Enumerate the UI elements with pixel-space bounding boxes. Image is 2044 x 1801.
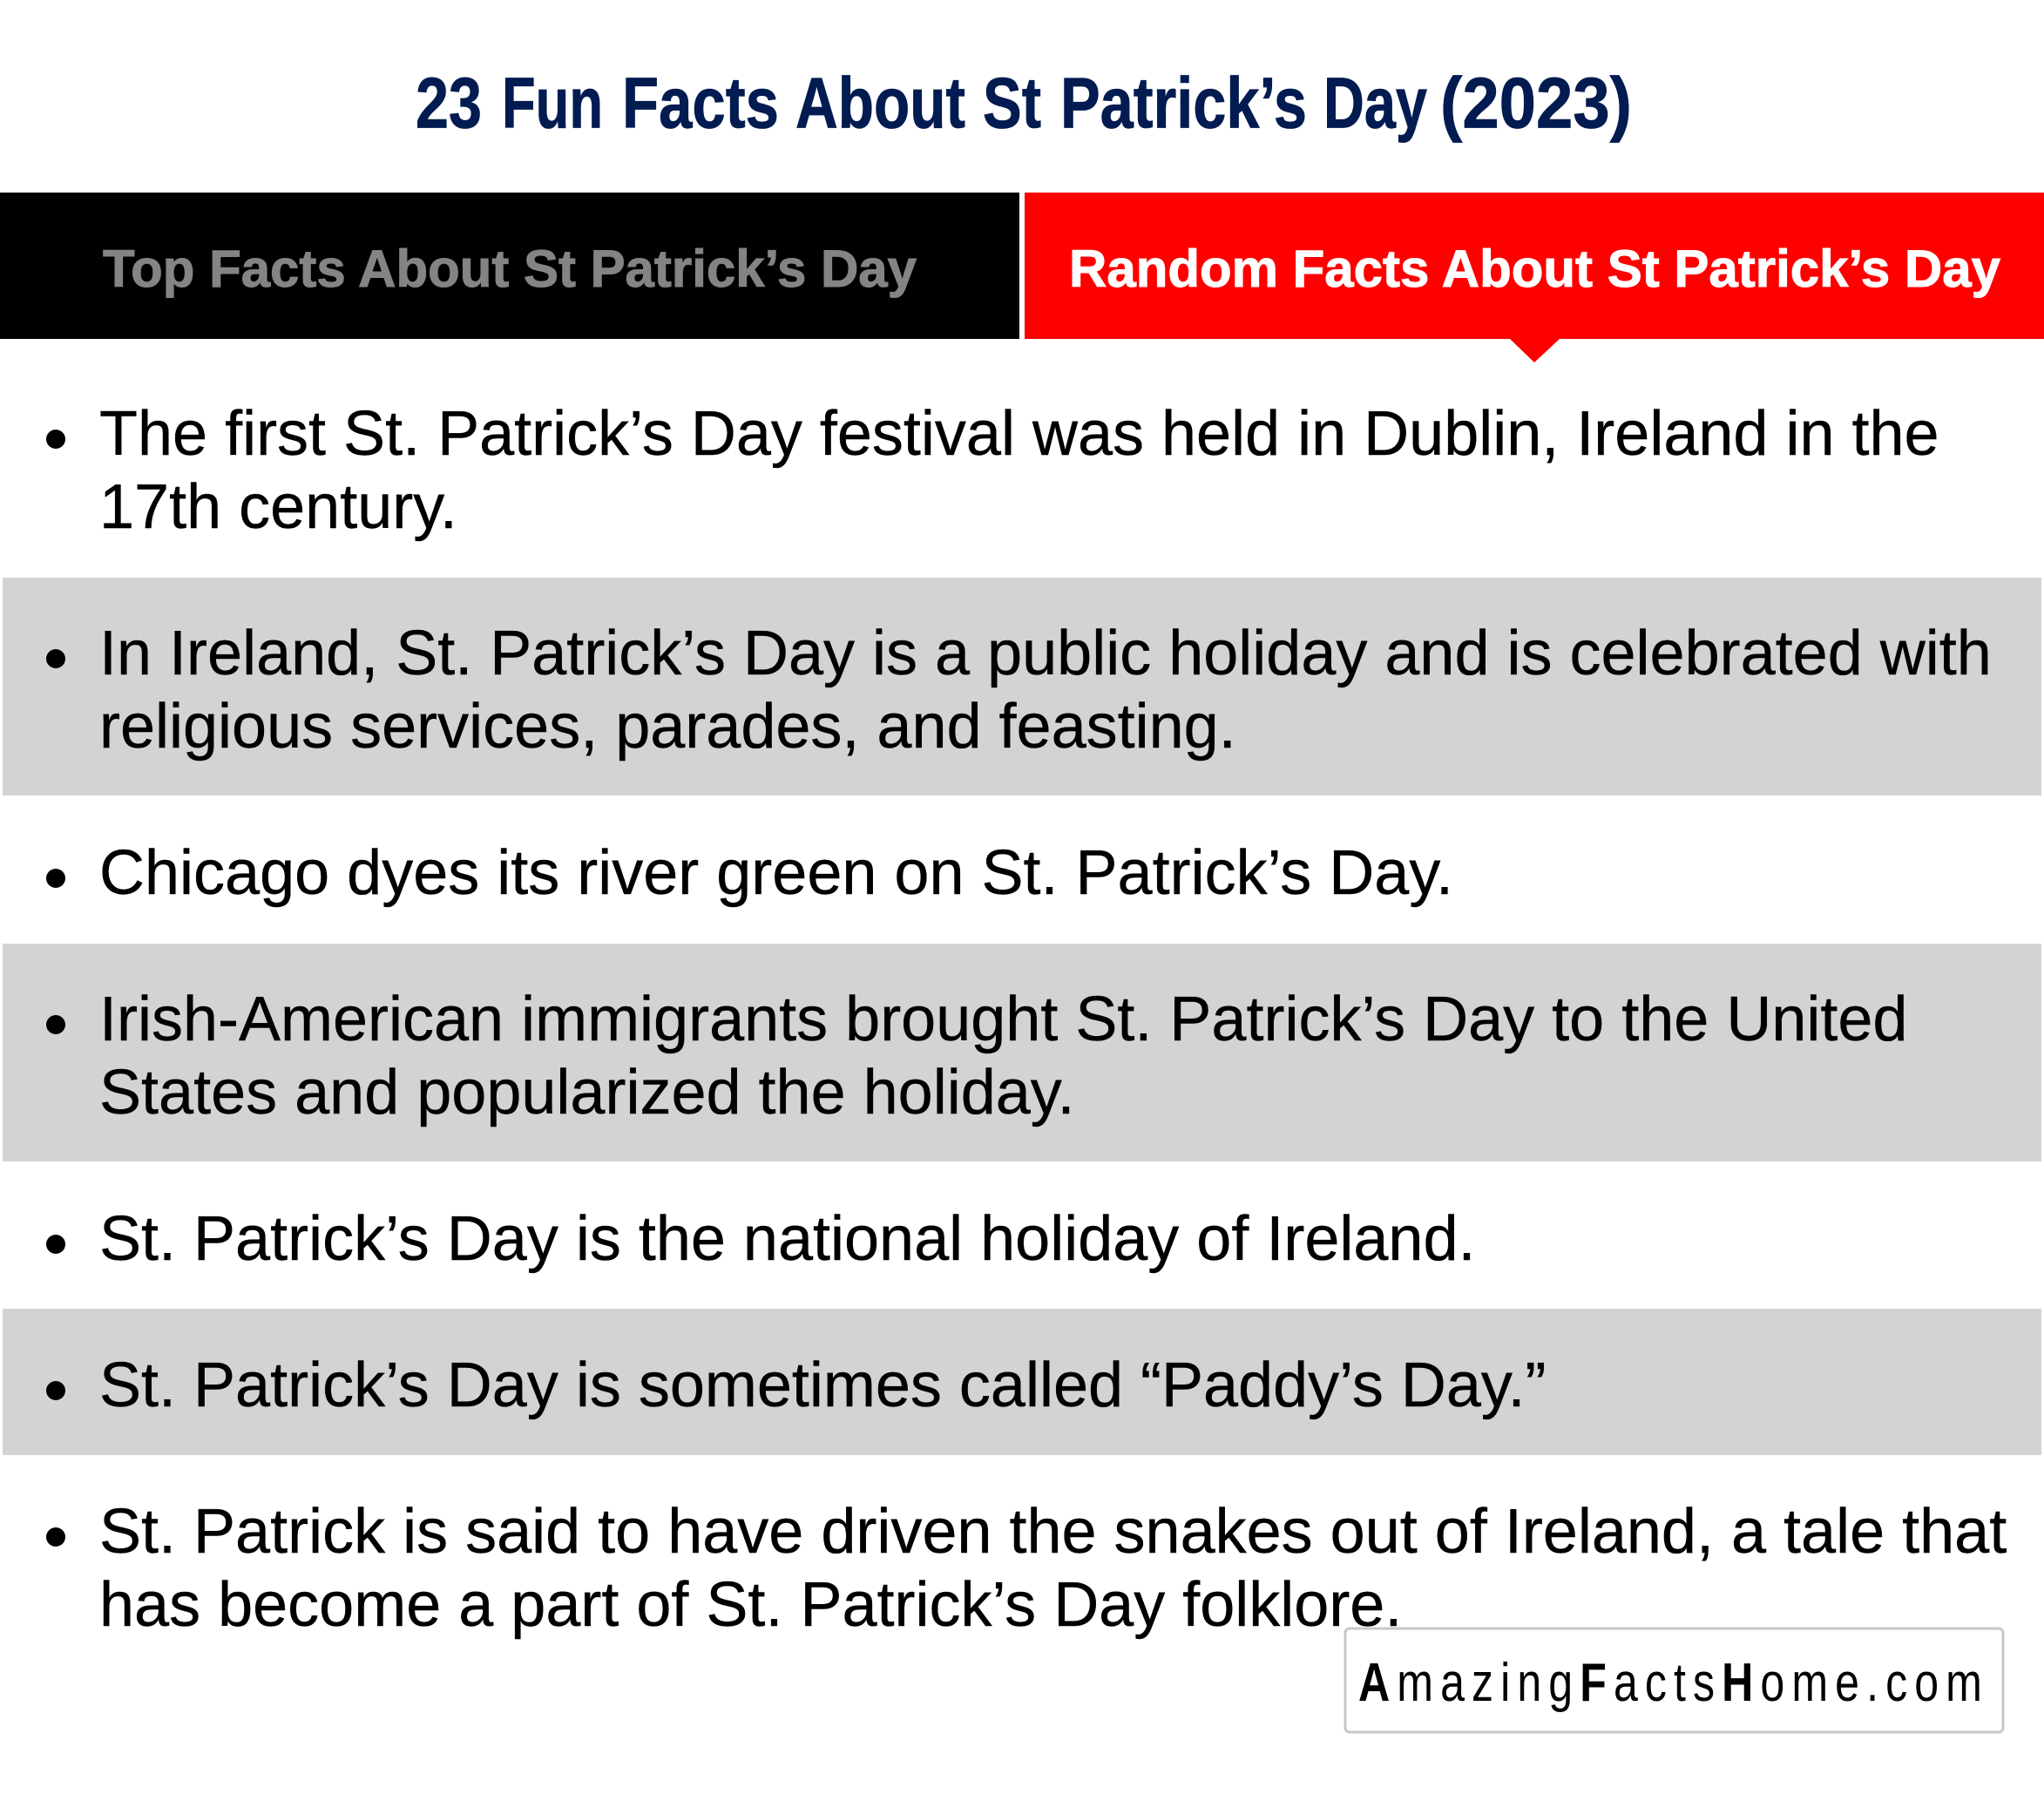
fact row 4: Irish-American immigrants brought St. Patrick’s Day to the United [99, 985, 1907, 1054]
tab: top facts (inactive): Top Facts About St Patrick’s Day [103, 240, 917, 298]
fact row 4 [3, 944, 2041, 1161]
tab: random facts (active): Random Facts About St Patrick’s Day [1069, 240, 2001, 298]
title: St [983, 63, 1041, 143]
title: Day [1323, 63, 1427, 143]
fact row 2: In Ireland, St. Patrick’s Day is a public holiday and is celebrated with [99, 619, 1992, 688]
tab: top facts (inactive) [0, 193, 1019, 339]
fact row 1 [46, 399, 1939, 542]
fact row 3: Chicago dyes its river green on St. Patrick’s Day. [99, 838, 1453, 908]
title: 23 [416, 63, 482, 143]
fact row 1: The first St. Patrick’s Day festival was held in Dublin, Ireland in the [99, 399, 1939, 469]
tab: random facts (active) [1025, 193, 2044, 362]
title: Patrick’s [1060, 63, 1307, 143]
title: Facts [622, 63, 779, 143]
fact row 2: religious services, parades, and feasting. [99, 692, 1236, 762]
watermark: AmazingFactsHome.com [1345, 1628, 2003, 1732]
fact row 7 [46, 1497, 2007, 1640]
fact row 2 [3, 578, 2041, 796]
fact row 6: St. Patrick’s Day is sometimes called “Paddy’s Day.” [99, 1351, 1547, 1420]
fact row 7: St. Patrick is said to have driven the snakes out of Ireland, a tale that [99, 1497, 2007, 1567]
fact row 5: St. Patrick’s Day is the national holiday of Ireland. [99, 1204, 1476, 1274]
watermark: AmazingFactsHome.com: AmazingFactsHome.com [1358, 1653, 1989, 1713]
title [416, 63, 1632, 143]
fact row 6 [3, 1309, 2041, 1455]
title: (2023) [1440, 63, 1632, 143]
title: About [795, 63, 965, 143]
fact row 1: 17th century. [99, 472, 457, 542]
fact row 4: States and popularized the holiday. [99, 1058, 1074, 1127]
fact row 7: has become a part of St. Patrick’s Day folklore. [99, 1570, 1402, 1640]
title: Fun [502, 63, 603, 143]
